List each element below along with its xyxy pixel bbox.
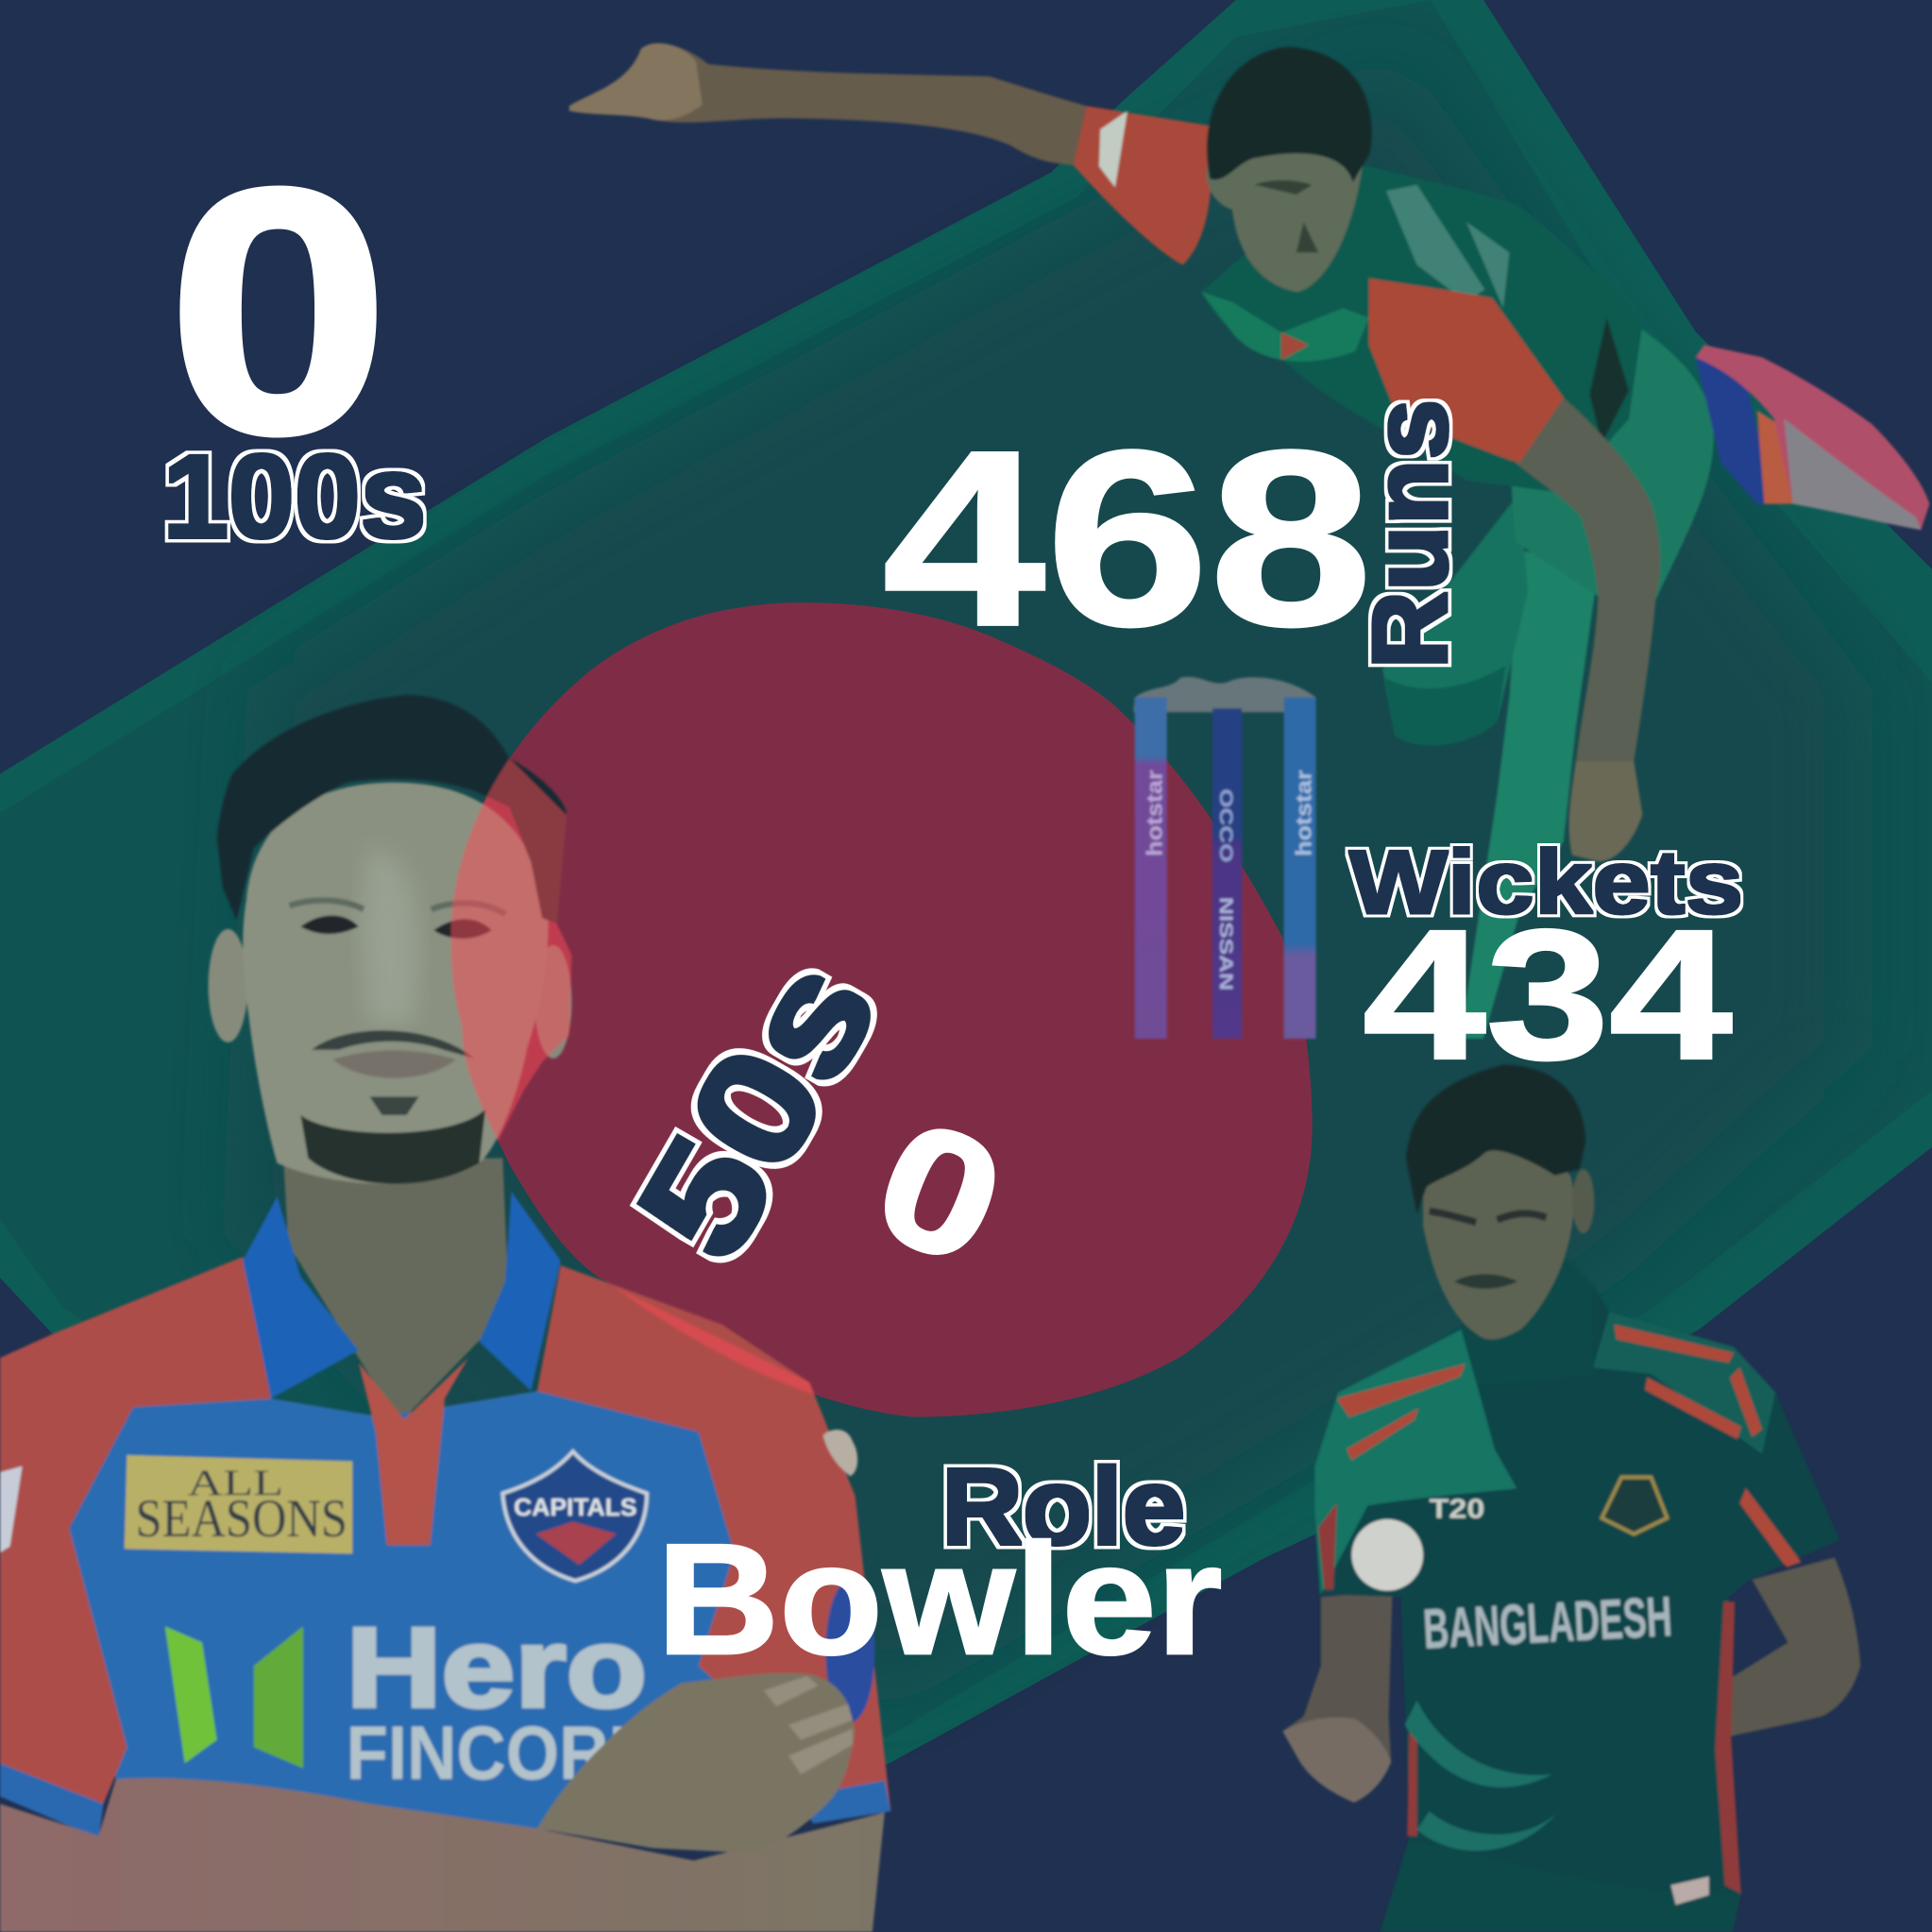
crossed arms <box>0 1778 885 1932</box>
ears <box>209 929 247 1042</box>
eyes and brows <box>300 916 492 939</box>
non-bowling arm <box>1509 398 1660 861</box>
head <box>1423 1149 1574 1339</box>
sleeve logo patch <box>825 1580 874 1722</box>
hip and trousers <box>1509 296 1714 610</box>
collar <box>1201 292 1369 362</box>
standing leg <box>1460 550 1598 1039</box>
beard <box>300 1109 485 1184</box>
placket <box>359 1358 468 1545</box>
sleeve marks <box>823 1430 857 1476</box>
collar <box>243 1196 359 1398</box>
stumps: hotstar <box>1142 771 1166 856</box>
photo: portrait in Delhi Capitals jersey: FINCORP <box>347 1711 654 1796</box>
jersey lettering: BANGLADESH <box>1422 1585 1673 1661</box>
lips <box>332 1050 456 1078</box>
neck <box>283 1159 509 1423</box>
sponsor patch: ALL <box>187 1463 283 1503</box>
jersey badge <box>1602 1478 1667 1534</box>
sunlit jersey panel <box>1314 1330 1517 1594</box>
flag: red disc <box>451 602 1313 1417</box>
team crest: CAPITALS <box>514 1493 637 1521</box>
stat: role value: Bowler <box>656 1512 1222 1687</box>
stumps: NISSAN <box>1215 897 1236 991</box>
red shoulders and sleeves <box>0 1257 271 1804</box>
stat: fifties value: 0 <box>851 1081 1028 1302</box>
world cup logo: T20 <box>1430 1495 1484 1525</box>
stat: centuries value: 0 <box>167 117 389 505</box>
red disc showing through the figure <box>449 755 814 1396</box>
trailing sock and shoe <box>1695 357 1774 504</box>
jersey <box>1314 1284 1839 1932</box>
sleeve cuffs <box>0 1763 104 1839</box>
red sleeves <box>1074 106 1212 265</box>
stumps <box>1133 677 1316 1039</box>
jersey stripes <box>1337 1325 1802 1568</box>
shorts <box>1380 1842 1741 1932</box>
jersey body <box>69 1391 764 1842</box>
stumps: hotstar <box>1291 771 1315 856</box>
stumps: OCCO <box>1215 788 1236 862</box>
stat: centuries label: 100s <box>162 431 426 563</box>
head <box>1207 64 1364 292</box>
stat: fifties label: 50s <box>604 931 910 1286</box>
cricket ball <box>1351 1519 1423 1591</box>
shorts sticker <box>1670 1876 1709 1905</box>
bent leg <box>1382 493 1528 746</box>
stat: runs value: 468 <box>882 399 1373 679</box>
moustache <box>312 1030 474 1059</box>
stat: wickets value: 434 <box>1363 892 1733 1098</box>
sponsor text: Hero <box>347 1604 647 1731</box>
jersey torso <box>1201 165 1642 493</box>
bails <box>1133 677 1316 712</box>
team crest <box>502 1451 647 1581</box>
photo: bowler holding the ball <box>1282 1064 1860 1932</box>
stat: wickets label: Wickets <box>1349 833 1743 933</box>
hair <box>217 695 567 924</box>
arms <box>1282 1592 1392 1803</box>
jersey wrinkles <box>1405 1701 1559 1851</box>
face <box>243 783 549 1184</box>
stat: role label: Role <box>941 1447 1185 1568</box>
stat: runs label: Runs <box>1350 399 1469 669</box>
sponsor mark <box>165 1626 303 1768</box>
photo: portrait in Delhi Capitals jersey <box>0 694 891 1932</box>
neck <box>1462 1257 1593 1386</box>
sponsor patch <box>125 1455 352 1553</box>
sponsor patch: SEASONS <box>136 1489 347 1549</box>
photo: bowler in delivery stride <box>569 43 1929 1039</box>
bowling arm <box>569 43 1087 165</box>
